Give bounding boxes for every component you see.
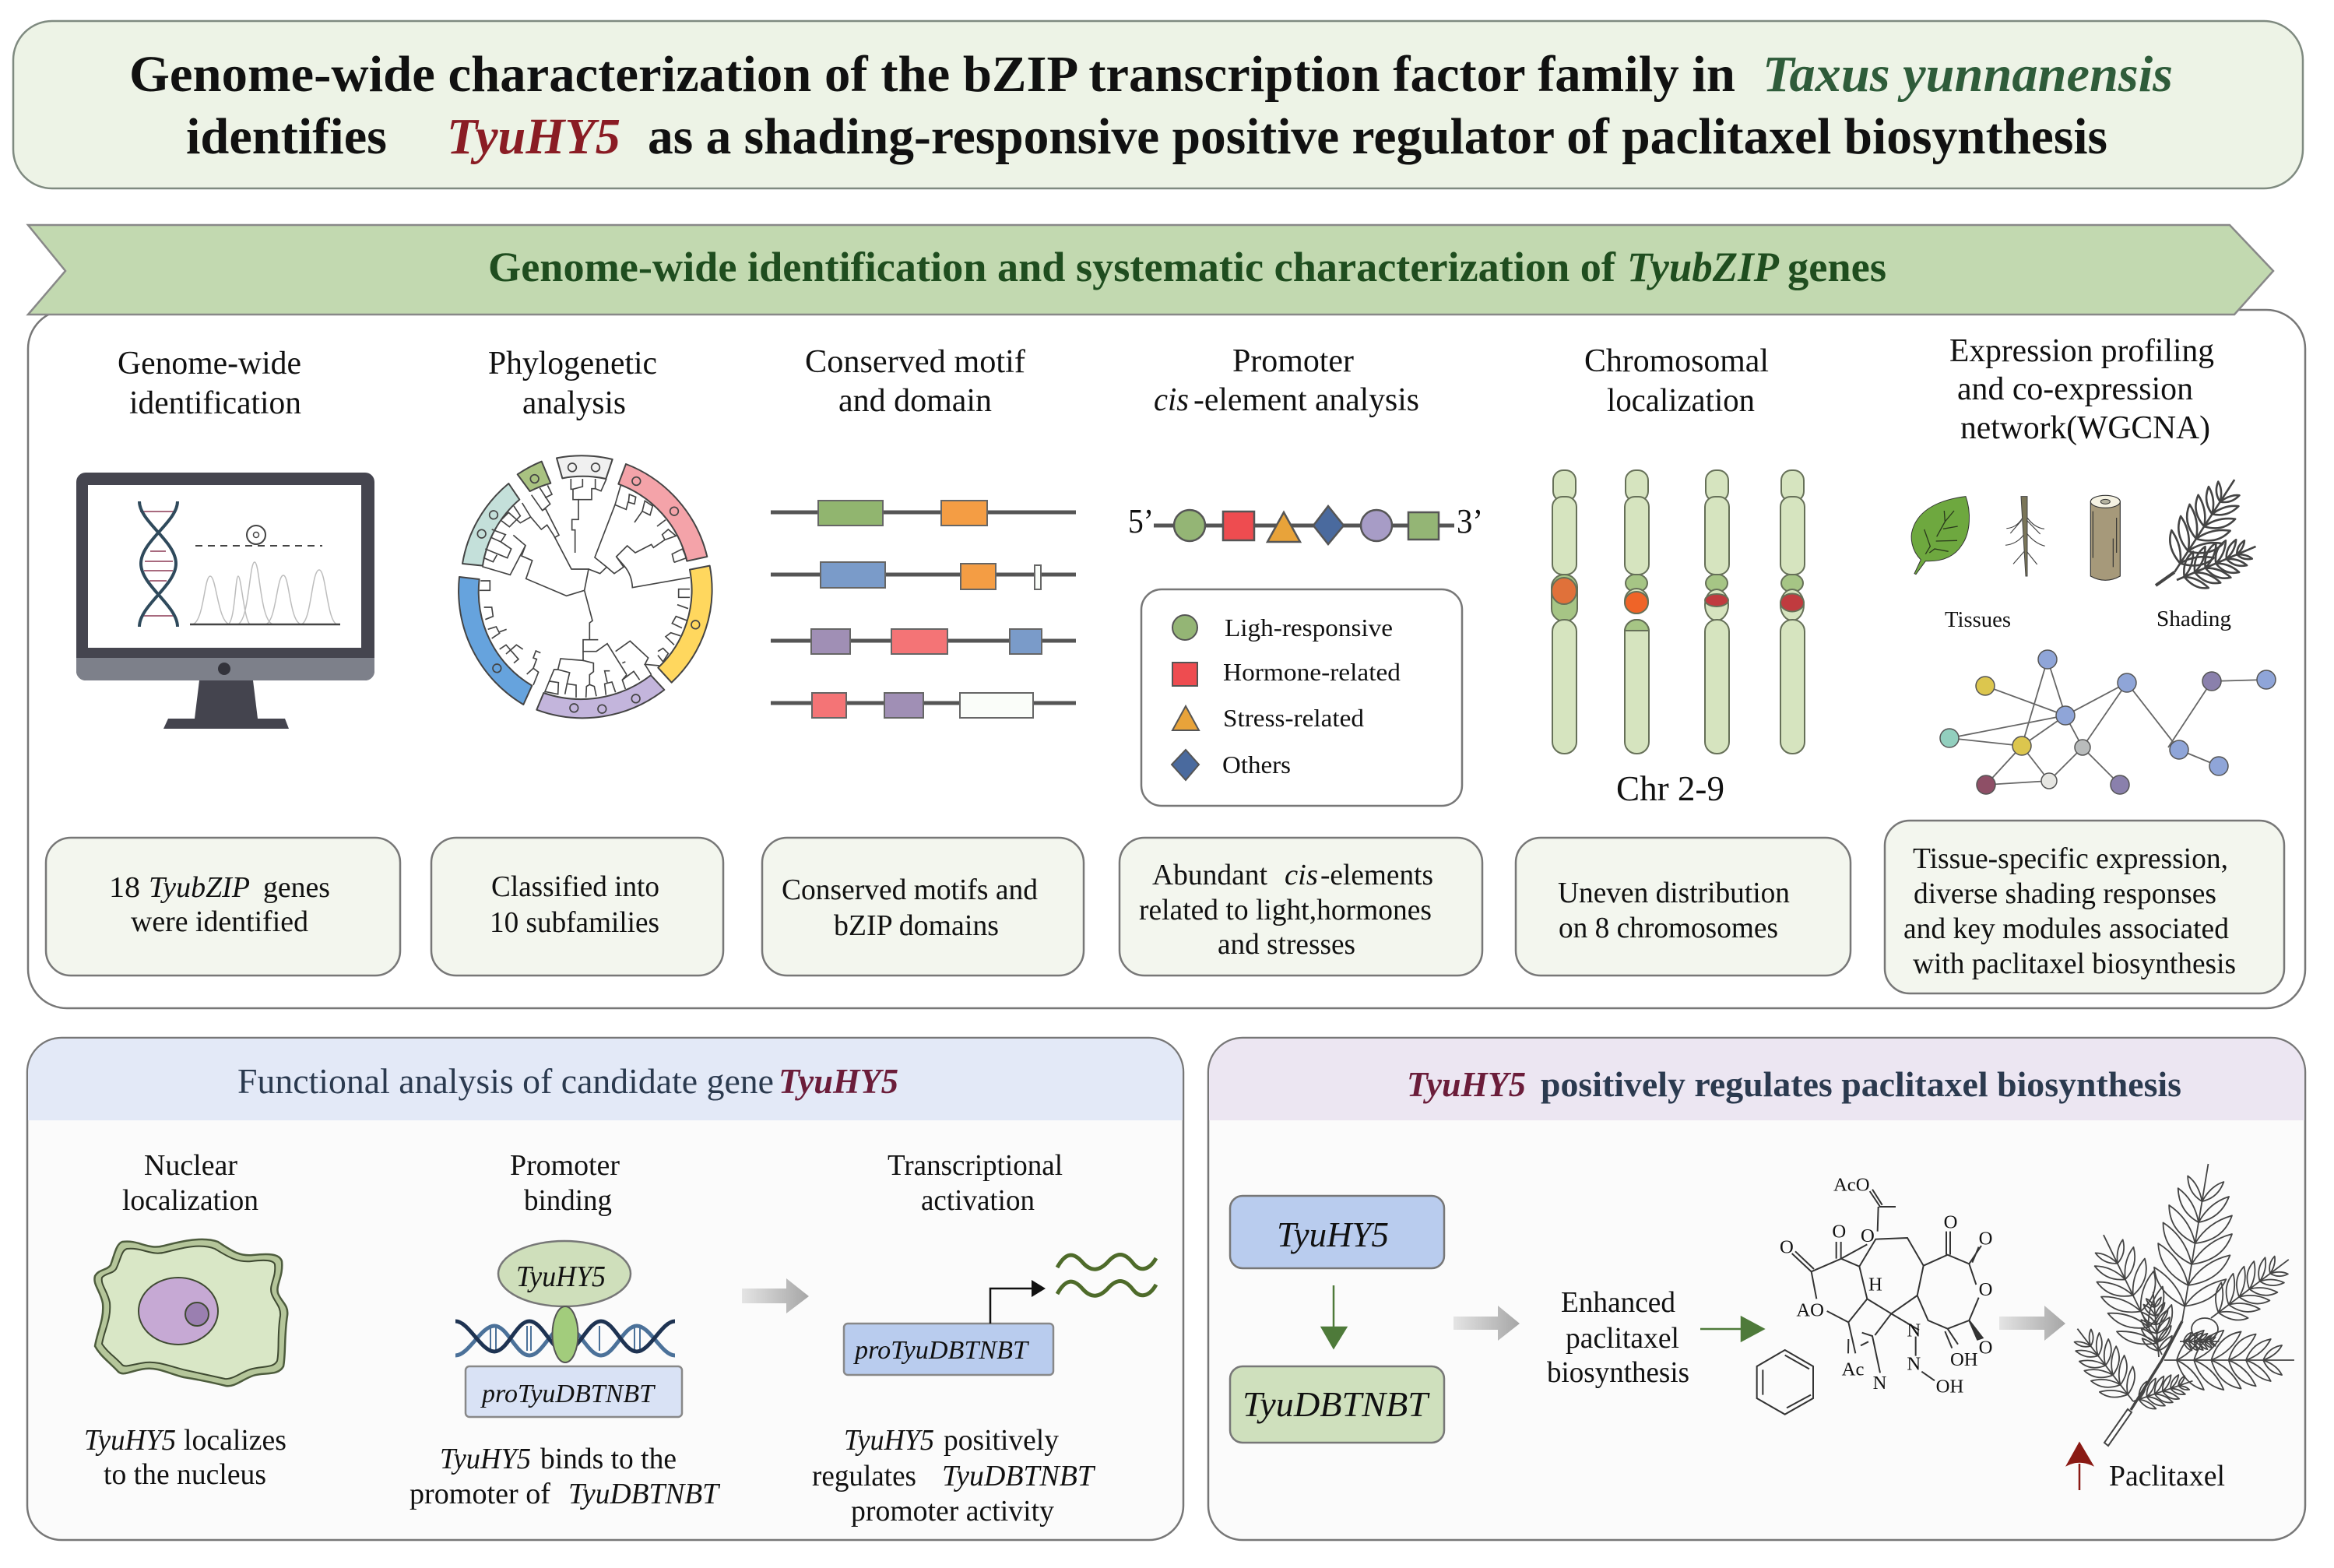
heading: promoter cis-element analysis: -element analysis — [1193, 382, 1419, 418]
text box: cis-elements: -elements — [1320, 859, 1433, 891]
text box: cis-elements: cis — [1285, 859, 1318, 891]
heading: nuclear localization — [122, 1149, 258, 1217]
chemical structure: paclitaxel: N — [1873, 1373, 1887, 1394]
title banner — [13, 21, 2303, 188]
icon: stem — [2090, 495, 2120, 580]
text: transcriptional activation result: regulates — [812, 1460, 916, 1492]
title banner: Taxus yunnanensis — [1763, 46, 2173, 103]
text: promoter binding result: TyuHY5 — [440, 1443, 531, 1475]
panel: positive regulation — [1208, 1038, 2305, 1540]
chemical structure: paclitaxel: O — [1979, 1228, 1992, 1249]
icon: computer monitor with DNA and peaks — [76, 473, 374, 729]
panel: genome-wide characterization — [28, 310, 2305, 1008]
diagram: promoter element string: 3’ — [1457, 502, 1483, 540]
heading: nuclear localization: Nuclear — [144, 1149, 237, 1182]
section banner arrow: genes — [1787, 244, 1886, 290]
heading: expression profiling: Expression profiling — [1949, 333, 2214, 369]
heading: nuclear localization: localization — [122, 1184, 258, 1217]
text box: genes identified: TyubZIP — [149, 871, 250, 904]
arrow: green to molecule — [1700, 1317, 1763, 1341]
text: transcriptional activation result: promoter activity — [851, 1495, 1054, 1528]
heading: chromosomal localization: localization — [1607, 383, 1755, 419]
label: Chr 2-9: Chr 2-9 — [1616, 768, 1724, 808]
chemical structure: paclitaxel: AcO — [1833, 1174, 1870, 1195]
heading: conserved motif and domain: Conserved motif — [805, 344, 1025, 380]
text: transcriptional activation result: TyuDBTNBT — [942, 1460, 1096, 1492]
arrow: paclitaxel increase — [2068, 1443, 2092, 1490]
chemical structure: paclitaxel: O — [1832, 1221, 1846, 1242]
heading: genome-wide identification — [118, 346, 301, 421]
chemical structure: paclitaxel: OH — [1950, 1349, 1978, 1370]
chemical structure: paclitaxel: O — [1861, 1225, 1875, 1246]
node: TyuDBTNBT — [1230, 1366, 1444, 1443]
diagram: TyuHY5 binding promoter: proTyuDBTNBT — [480, 1380, 656, 1408]
text box: conserved motifs: Conserved motifs and — [782, 874, 1038, 906]
text box: genes identified: were identified — [131, 905, 308, 938]
diagram: transcriptional activation — [844, 1255, 1156, 1375]
text box: genes identified — [46, 838, 400, 976]
text: transcriptional activation result: positively — [944, 1424, 1059, 1457]
header: functional analysis: Functional analysis of candidate gene — [237, 1062, 774, 1101]
heading: phylogenetic analysis — [488, 346, 657, 421]
title banner: TyuHY5 — [447, 108, 620, 165]
text: transcriptional activation result — [812, 1424, 1096, 1528]
chart: chromosomes — [1552, 470, 1805, 754]
legend: cis element classes — [1141, 589, 1462, 806]
section banner arrow: TyubZIP — [1627, 244, 1780, 290]
legend: cis element classes: Stress-related — [1223, 704, 1364, 732]
text box: conserved motifs: bZIP domains — [834, 909, 999, 942]
text box: expression summary: with paclitaxel biosynthesis — [1913, 947, 2236, 980]
title banner: identifies — [186, 108, 387, 165]
chemical structure: paclitaxel: O — [1979, 1279, 1992, 1300]
text: enhanced biosynthesis: biosynthesis — [1547, 1356, 1689, 1389]
title banner: as a shading-responsive positive regulator of paclitaxel biosynthesis — [648, 108, 2107, 165]
text: promoter binding result: promoter of — [410, 1478, 550, 1510]
legend: cis element classes: Hormone-related — [1223, 658, 1401, 686]
chemical structure: paclitaxel — [1757, 1174, 1992, 1415]
text box: genes identified: genes — [263, 871, 330, 904]
label: tissues and shading: Tissues — [1945, 608, 2011, 632]
chemical structure: paclitaxel: N — [1907, 1353, 1921, 1374]
text: transcriptional activation result: TyuHY5 — [844, 1424, 934, 1457]
chart: motif gene tracks — [771, 501, 1076, 718]
chemical structure: paclitaxel: H — [1868, 1274, 1882, 1296]
section banner arrow — [28, 225, 2273, 315]
text box: uneven distribution: Uneven distribution — [1558, 877, 1790, 909]
icon: leaf — [1911, 497, 1970, 575]
heading: phylogenetic analysis: Phylogenetic — [488, 346, 657, 381]
text box: cis-elements: related to light,hormones — [1139, 894, 1432, 926]
heading: conserved motif and domain: and domain — [838, 383, 992, 419]
panel: functional analysis — [27, 1038, 1183, 1540]
node: TyuHY5 — [1230, 1196, 1444, 1268]
heading: genome-wide identification: identification — [129, 385, 301, 421]
text: nuclear localization result — [84, 1424, 286, 1491]
heading: conserved motif and domain — [805, 344, 1025, 419]
icon: shaded twig — [2153, 466, 2263, 598]
heading: promoter cis-element analysis: cis — [1154, 382, 1189, 418]
text: promoter binding result — [410, 1443, 721, 1510]
text box: subfamilies: 10 subfamilies — [490, 906, 659, 939]
text box: expression summary: Tissue-specific expression, — [1913, 842, 2228, 875]
arrow: TyuHY5 to TyuDBTNBT — [1322, 1285, 1346, 1348]
heading: chromosomal localization: Chromosomal — [1584, 343, 1769, 379]
chemical structure: paclitaxel: Ac — [1842, 1359, 1864, 1380]
text box: subfamilies — [431, 838, 723, 976]
text: promoter binding result: TyuDBTNBT — [568, 1478, 721, 1510]
heading: expression profiling — [1949, 333, 2214, 446]
chart: co-expression network — [1940, 650, 2276, 794]
label: tissues and shading — [1945, 607, 2231, 632]
diagram: promoter element string: 5’ — [1128, 502, 1154, 540]
chemical structure: paclitaxel: O — [1944, 1211, 1957, 1232]
text: promoter binding result: binds to the — [540, 1443, 677, 1475]
heading: phylogenetic analysis: analysis — [522, 385, 626, 421]
header: positive regulation — [1209, 1039, 2304, 1120]
text: enhanced biosynthesis: Enhanced — [1561, 1286, 1675, 1319]
header: functional analysis — [28, 1039, 1183, 1120]
text box: uneven distribution — [1516, 838, 1851, 976]
icon: root — [2005, 497, 2045, 576]
header: positive regulation: TyuHY5 — [1407, 1064, 1526, 1104]
arrow: grey flow arrow — [1453, 1306, 1520, 1341]
text: nuclear localization result: to the nucleus — [104, 1458, 266, 1491]
arrow: grey flow arrow — [1999, 1306, 2065, 1341]
icon: Taxus branch — [2061, 1158, 2302, 1446]
heading: genome-wide identification: Genome-wide — [118, 346, 301, 381]
heading: promoter binding: binding — [524, 1184, 612, 1217]
text box: subfamilies: Classified into — [491, 870, 659, 903]
header: functional analysis: TyuHY5 — [779, 1062, 898, 1101]
legend: cis element classes: Others — [1222, 751, 1291, 779]
diagram: TyuHY5 binding promoter — [455, 1241, 682, 1417]
heading: expression profiling: and co-expression — [1957, 371, 2193, 407]
diagram: transcriptional activation: proTyuDBTNBT — [853, 1336, 1029, 1365]
text box: cis-elements: and stresses — [1218, 928, 1355, 961]
text box: genes identified: 18 — [109, 871, 140, 904]
arrow: grey flow arrow — [742, 1278, 809, 1313]
text box: cis-elements — [1120, 838, 1482, 976]
text box: uneven distribution: on 8 chromosomes — [1559, 912, 1778, 944]
heading: promoter binding: Promoter — [510, 1149, 620, 1182]
text box: conserved motifs — [762, 838, 1084, 976]
header: positive regulation: positively regulates paclitaxel biosynthesis — [1541, 1064, 2181, 1104]
text box: cis-elements: Abundant — [1152, 859, 1267, 891]
text: enhanced biosynthesis — [1547, 1286, 1689, 1389]
title banner: Genome-wide characterization of the bZIP transcription factor family in — [129, 46, 1735, 103]
text: nuclear localization result: TyuHY5 — [84, 1424, 176, 1457]
node: TyuHY5: TyuHY5 — [1277, 1215, 1389, 1254]
heading: transcriptional activation: activation — [921, 1184, 1035, 1217]
heading: promoter cis-element analysis — [1154, 343, 1419, 418]
heading: chromosomal localization — [1584, 343, 1769, 419]
diagram: promoter element string — [1128, 502, 1483, 544]
chemical structure: paclitaxel: AO — [1796, 1300, 1824, 1321]
text: enhanced biosynthesis: paclitaxel — [1566, 1322, 1679, 1355]
diagram: TyuHY5 binding promoter: TyuHY5 — [516, 1260, 606, 1293]
chemical structure: paclitaxel: N — [1907, 1320, 1921, 1341]
text box: expression summary: diverse shading responses — [1914, 877, 2216, 910]
heading: promoter cis-element analysis: Promoter — [1232, 343, 1354, 379]
text: nuclear localization result: localizes — [184, 1424, 286, 1457]
chemical structure: paclitaxel: O — [1979, 1337, 1992, 1358]
chart: circular phylogenetic tree — [459, 455, 712, 718]
heading: transcriptional activation: Transcriptional — [888, 1149, 1063, 1182]
legend: cis element classes: Ligh-responsive — [1225, 613, 1393, 642]
chemical structure: paclitaxel: O — [1780, 1236, 1794, 1257]
text box: expression summary: and key modules associated — [1903, 912, 2229, 945]
label: tissues and shading: Shading — [2156, 607, 2231, 631]
section banner arrow: Genome-wide identification and systematic characterization of — [488, 244, 1616, 290]
node: TyuDBTNBT: TyuDBTNBT — [1243, 1384, 1430, 1424]
label: paclitaxel: Paclitaxel — [2109, 1460, 2225, 1492]
text box: expression summary — [1885, 821, 2284, 993]
heading: promoter binding — [510, 1149, 620, 1217]
icon: plant cell with nucleus — [94, 1239, 287, 1386]
chemical structure: paclitaxel: OH — [1936, 1376, 1963, 1397]
heading: transcriptional activation — [888, 1149, 1063, 1217]
heading: expression profiling: network(WGCNA) — [1960, 410, 2210, 446]
